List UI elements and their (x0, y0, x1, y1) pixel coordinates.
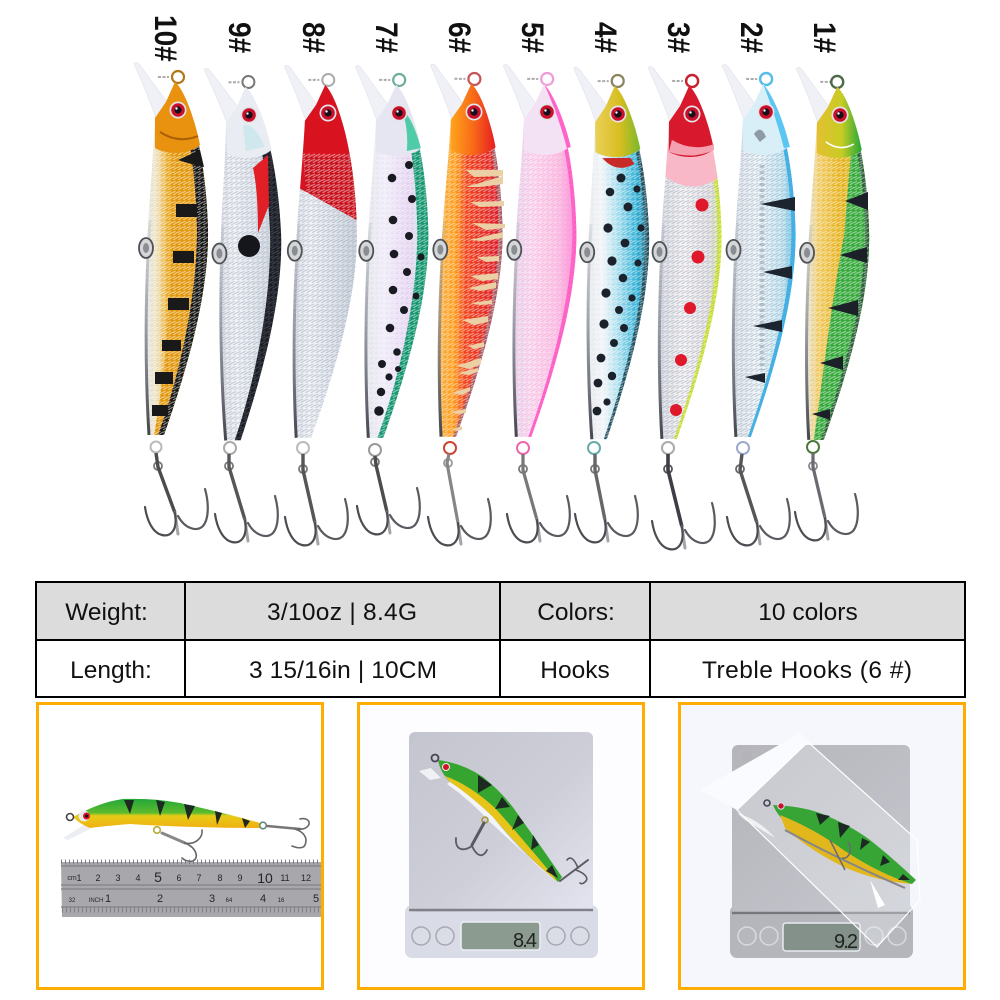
lure 6: orange and red with tan stripes (426, 64, 505, 545)
ruler: 11 (280, 873, 290, 883)
lure 1: yellow and green with dark bars (794, 67, 870, 540)
ruler: 2 (157, 893, 163, 905)
digital scale (405, 732, 598, 958)
ruler: 10 (257, 870, 273, 886)
panel: lure on scale reading 8.4 (358, 704, 644, 988)
plastic bag and header card (700, 733, 920, 947)
lure in bag (764, 800, 916, 888)
panel: lure beside ruler (38, 704, 322, 988)
table label: colors: Colors: (537, 599, 615, 626)
number label 8#: 8# (296, 22, 330, 54)
number label 1#: 1# (807, 22, 841, 54)
table value: hooks: Treble Hooks (6 #) (702, 657, 912, 684)
ruler: 1 (76, 873, 82, 883)
number label 3#: 3# (661, 22, 695, 54)
horizontal lure with hooks (63, 799, 309, 861)
table value: colors: 10 colors (758, 599, 858, 626)
lure 2: pale blue with dark bars (721, 65, 796, 545)
number label 2#: 2# (734, 22, 768, 54)
scale reading: 9.2 (834, 931, 858, 953)
ruler: 32 (69, 898, 76, 904)
number label 4#: 4# (588, 22, 622, 54)
ruler: cm (67, 875, 77, 882)
ruler: INCH (89, 898, 103, 904)
ruler: 3 (209, 893, 215, 905)
ruler: 4 (260, 893, 266, 905)
number label 6#: 6# (442, 22, 476, 54)
ruler: 5 (313, 893, 319, 905)
table value: length: 3 15/16in | 10CM (249, 657, 437, 684)
lure 9: silver with red fin and black dot (204, 67, 285, 542)
scale reading: 8.4 (513, 930, 537, 952)
lure 8: silver with red head (284, 65, 357, 546)
table label: length: Length: (70, 657, 152, 684)
panel: packaged lure on scale reading 9.2 (680, 704, 964, 988)
number label 7#: 7# (369, 22, 403, 54)
specification table (36, 582, 965, 697)
ruler: 6 (176, 873, 182, 883)
number label 9#: 9# (222, 22, 256, 54)
number label 10#: 10# (148, 15, 182, 62)
ruler: 16 (278, 898, 285, 904)
ruler: 1 (105, 893, 111, 905)
digital scale (730, 745, 913, 958)
table value: weight: 3/10oz | 8.4G (267, 599, 417, 626)
ruler: 64 (226, 898, 233, 904)
ruler: 2 (95, 873, 101, 883)
ruler: 8 (217, 873, 223, 883)
table label: hooks: Hooks (540, 657, 610, 684)
lure 7: silver lilac with teal back and black spots (353, 65, 429, 534)
lure 4: blue with black spots and yellow head (574, 66, 651, 542)
lure 5: pink (501, 64, 577, 542)
number label 5#: 5# (515, 22, 549, 54)
ruler: 7 (196, 873, 202, 883)
ruler: 5 (154, 869, 162, 885)
table label: weight: Weight: (65, 599, 148, 626)
lure 3: white with red head and red spots (647, 67, 724, 549)
lure on scale (419, 754, 588, 884)
ruler: 9 (237, 873, 243, 883)
ruler: 12 (301, 873, 311, 883)
ruler: 4 (135, 873, 141, 883)
ruler: 3 (115, 873, 121, 883)
ruler (61, 862, 321, 917)
lure 10: orange with black bars (134, 63, 208, 535)
